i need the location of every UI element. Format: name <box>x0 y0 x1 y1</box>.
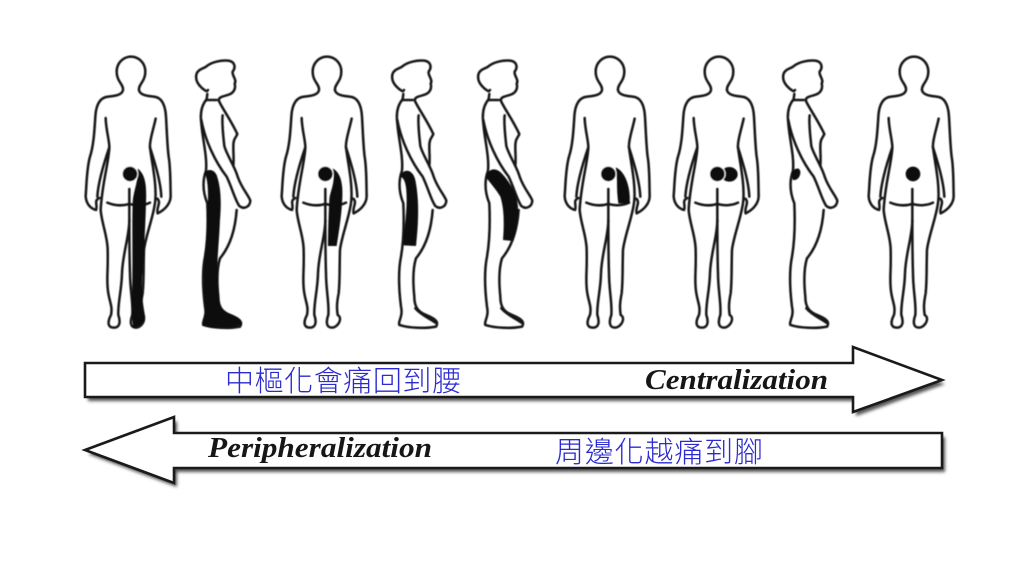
label: Chinese peripheralization: 周邊化越痛到腳 <box>555 436 763 469</box>
arrow: centralization <box>85 347 945 416</box>
figure 3: back view, pain to mid thigh <box>282 57 367 328</box>
figure 9: back view, pain only at central low back <box>869 57 954 328</box>
figures row <box>86 57 954 328</box>
arrow: peripheralization <box>85 417 945 487</box>
figure 4: side view, pain to mid thigh <box>392 61 446 328</box>
figure 5: side view, pain over buttock and thigh <box>478 61 532 328</box>
label: Chinese centralization: 中樞化會痛回到腰 <box>225 365 461 398</box>
label: Centralization: Centralization <box>645 365 828 396</box>
figure 6: back view, pain over buttock <box>565 57 650 328</box>
figure 1: back view, pain down entire leg to foot <box>86 57 171 328</box>
figure 2: side view, pain along back of leg to foot <box>196 61 250 328</box>
figure 7: back view, pain near spine and buttock <box>674 57 759 328</box>
label: Peripheralization: Peripheralization <box>207 433 432 464</box>
figure 8: side view, small pain patch at low back <box>783 61 837 328</box>
